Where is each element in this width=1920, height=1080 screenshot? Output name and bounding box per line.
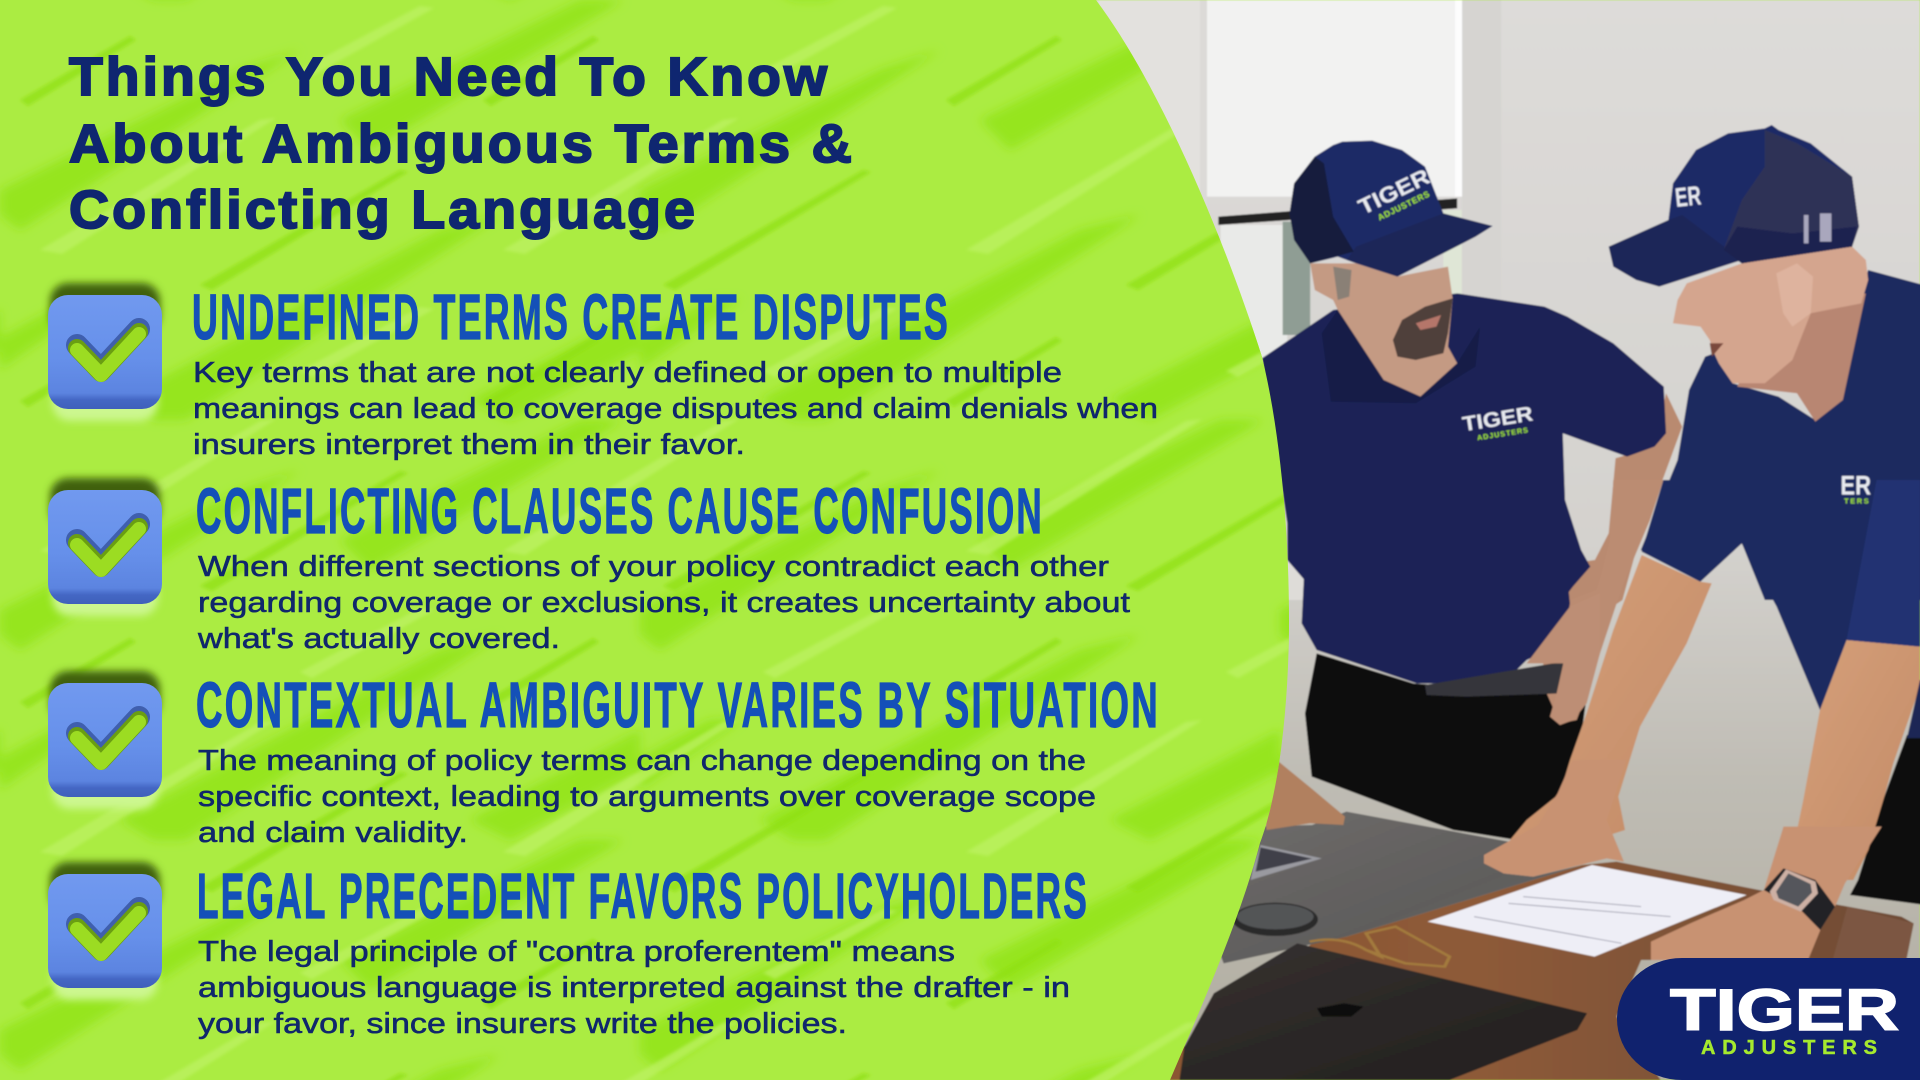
text: legal precedent body [198,936,1070,1040]
man 1 cap and shirt logos: TIGER [1354,164,1434,220]
text: contextual ambiguity body: and claim validity. [198,817,468,849]
man 1 shirt lower [1302,553,1570,683]
man 1 cap [1290,141,1493,277]
paper [1427,865,1747,957]
title [69,47,855,240]
man 1 cap and shirt logos: TIGER [1461,403,1535,436]
man 2 pants [1850,735,1920,905]
heading: legal precedent: LEGAL PRECEDENT FAVORS POLICYHOLDERS [197,860,1089,932]
text: legal precedent body: The legal principle of "contra proferentem" means [198,936,955,968]
text: conflicting clauses body: what's actually covered. [197,623,560,655]
man 1 cap and shirt logos: ADJUSTERS [1376,189,1431,223]
green panel with curved edge [0,0,1330,1080]
heading: undefined terms: UNDEFINED TERMS CREATE DISPUTES [192,281,950,353]
desk [1121,812,1914,1080]
logo badge: Tiger Adjusters: ADJUSTERS [1701,1037,1877,1059]
text: contextual ambiguity body: The meaning of policy terms can change depending on the [198,745,1086,777]
heading: contextual ambiguity: CONTEXTUAL AMBIGUITY VARIES BY SITUATION [196,669,1160,741]
desk items [1179,845,1587,1080]
title: Things You Need To Know [69,47,830,107]
icon: checkbox 1 [48,283,162,421]
photo: two adjusters at a desk [1080,0,1920,1080]
text: legal precedent body: ambiguous language is interpreted against the drafter - in [198,972,1070,1004]
logo badge: Tiger Adjusters: TIGER [1670,978,1899,1043]
text: legal precedent body: your favor, since insurers write the policies. [198,1008,847,1040]
man 2 hand right [1651,827,1882,960]
text: conflicting clauses body [197,551,1130,655]
belt [1425,662,1563,697]
man 2 logos: ER [1674,180,1702,213]
man 1 arm [1549,393,1682,633]
text: undefined terms body: insurers interpret them in their favor. [193,429,745,461]
man 2 logos: TERS [1844,496,1869,505]
text: conflicting clauses body: When different sections of your policy contradict each other [198,551,1110,583]
wall and window [1080,0,1920,1080]
icon: checkbox 4 [48,862,162,1000]
man 1 cap and shirt logos [1354,164,1536,444]
man 2 shirt right edge [1907,680,1920,738]
watch [1764,868,1835,930]
man 2 logos: ER [1840,471,1871,501]
text: undefined terms body: meanings can lead to coverage disputes and claim denials when [193,393,1158,425]
man 1 shirt [1262,293,1666,617]
man 1 hand on desk [1265,760,1345,830]
title: About Ambiguous Terms & [69,114,855,174]
heading: conflicting clauses: CONFLICTING CLAUSES CAUSE CONFUSION [196,475,1044,547]
logo badge: Tiger Adjusters [1617,958,1920,1080]
man 2 head [1673,247,1868,422]
text: conflicting clauses body: regarding coverage or exclusions, it creates uncertainty about [198,587,1130,619]
man 2 logos [1674,180,1871,505]
title: Conflicting Language [69,180,698,240]
man 2 hand left [1484,760,1626,877]
man 1 hand on hip [1527,593,1600,725]
man 2 cap [1609,125,1859,287]
icon: checkbox 2 [48,478,162,616]
shirt sleeve highlight [1847,480,1920,647]
icon: checkbox 3 [48,671,162,809]
text: undefined terms body: Key terms that are not clearly defined or open to multiple [193,357,1062,389]
man 2 arm left [1510,555,1712,847]
man 2 shirt [1641,270,1920,600]
man 2 arm right [1787,640,1920,880]
man 1 lower arm [1540,480,1663,723]
man 2 lower shirt [1642,480,1920,710]
text: contextual ambiguity body: specific context, leading to arguments over coverage scope [198,781,1096,813]
man 1 head [1310,263,1480,403]
text: contextual ambiguity body [198,745,1096,849]
man 1 pants [1305,653,1587,840]
text: undefined terms body [193,357,1158,461]
man 1 cap and shirt logos: ADJUSTERS [1476,425,1529,442]
